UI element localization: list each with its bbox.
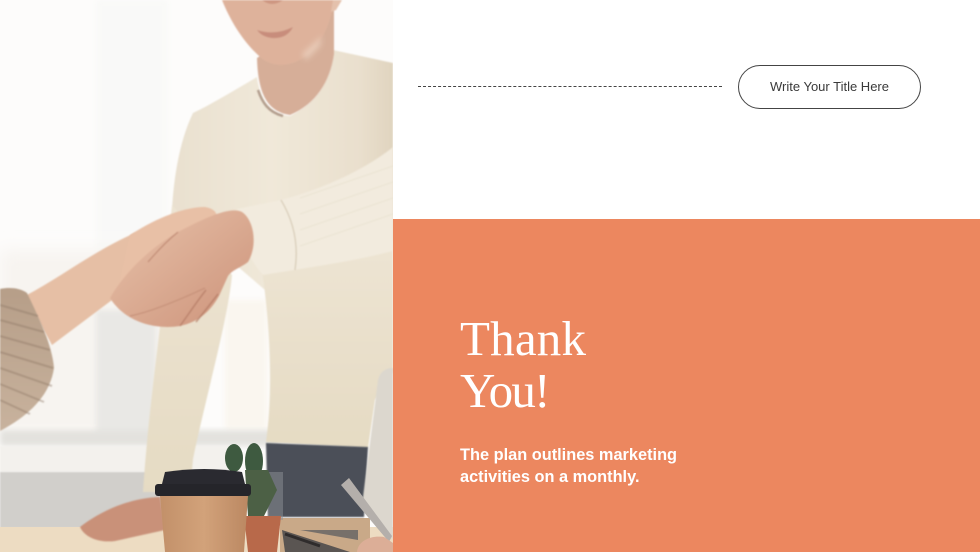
title pill: Write Your Title Here <box>770 79 889 94</box>
cactus in terracotta pot <box>225 443 283 552</box>
panel: orange thank-you block <box>393 219 980 552</box>
person: sweater torso and arm <box>143 50 393 492</box>
text block: plan description: The plan outlines marketing <box>460 446 677 464</box>
person: extended arm sleeve <box>237 147 393 275</box>
photo: handshake between two people at a desk <box>0 0 393 552</box>
heading: Thank You!: Thank <box>460 311 586 366</box>
background: bright window <box>0 0 393 552</box>
left person: knit sleeve <box>0 288 54 431</box>
heading: Thank You! <box>460 311 586 418</box>
phone and hand <box>341 478 393 552</box>
title pill <box>738 65 921 109</box>
pens and notebook on desk <box>282 530 358 552</box>
laptop <box>362 368 393 540</box>
resting hand on desk <box>80 497 165 541</box>
person: face and neck <box>222 0 342 116</box>
left person: forearm <box>25 233 140 345</box>
text block: plan description <box>460 446 677 486</box>
coffee cup <box>155 469 251 552</box>
text block: plan description: activities on a monthly. <box>460 468 640 486</box>
handshake hands <box>110 207 254 327</box>
heading: Thank You!: You! <box>460 363 549 418</box>
person: jeans <box>266 443 368 517</box>
dashed divider line <box>418 86 722 87</box>
